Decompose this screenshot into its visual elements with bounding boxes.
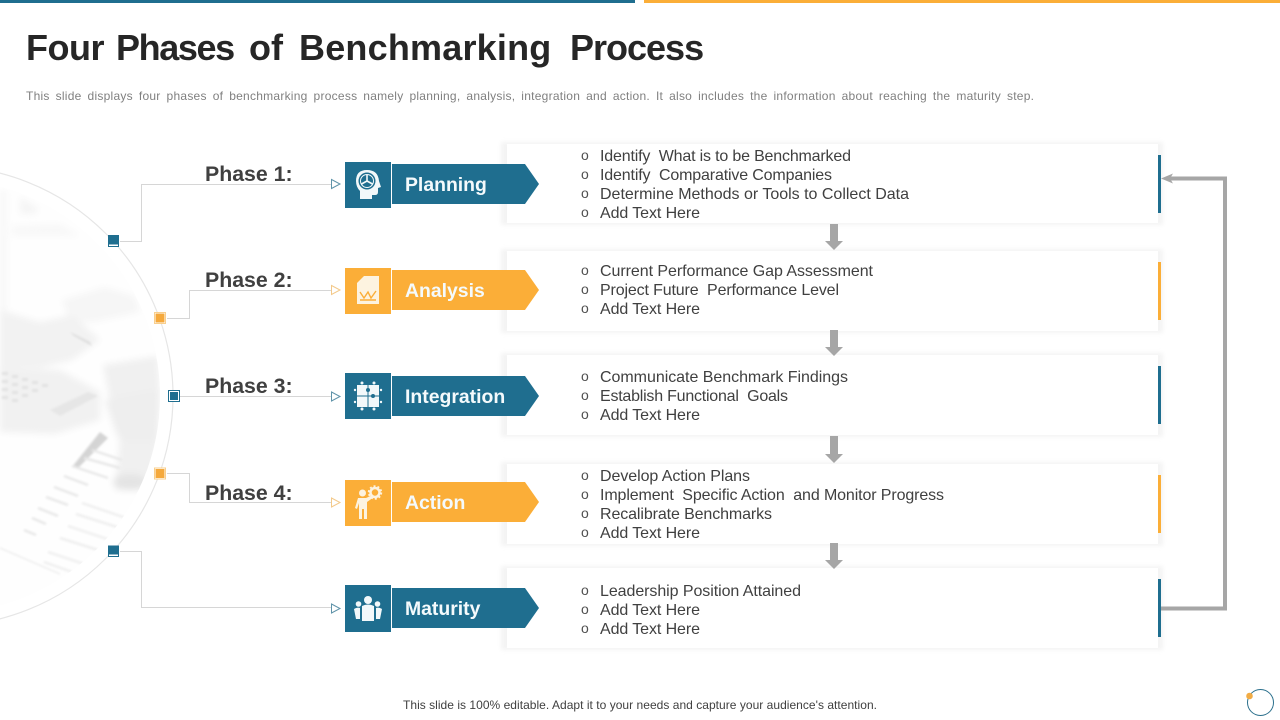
card: maturity xyxy=(501,566,1163,650)
title: Phases xyxy=(116,27,234,68)
bullet list: o xyxy=(581,185,589,201)
bullet list: o xyxy=(581,300,589,316)
bullet list: Project Future Performance Level xyxy=(600,282,839,299)
top accent bar: orange xyxy=(644,0,1280,3)
bullet list: o xyxy=(581,467,589,483)
arrowhead xyxy=(332,498,340,507)
title: Benchmarking xyxy=(299,27,551,68)
phase bar: analysis xyxy=(392,270,539,310)
photo detail: pen and document lines xyxy=(0,432,126,574)
bullet list: Identify What is to be Benchmarked xyxy=(600,148,851,165)
bullet list: Current Performance Gap Assessment xyxy=(600,263,874,280)
bullet list: Develop Action Plans xyxy=(600,468,750,485)
bullet list: Identify Comparative Companies xyxy=(600,167,832,184)
bullet list: o xyxy=(581,387,589,403)
arrowhead xyxy=(332,392,340,401)
bullet list: o xyxy=(581,147,589,163)
bullet list xyxy=(581,582,801,638)
card: analysis xyxy=(501,249,1163,333)
phase bar: action: Action xyxy=(405,492,465,514)
bullet list: o xyxy=(581,262,589,278)
marker: maturity xyxy=(108,546,118,556)
down arrow 2 xyxy=(825,330,843,356)
bullet list: Implement Specific Action and Monitor Progress xyxy=(600,487,944,504)
bullet list: Establish Functional Goals xyxy=(600,388,788,405)
bullet list: o xyxy=(581,582,589,598)
marker: phase 4 xyxy=(154,468,166,479)
phase 3 label: Phase 3: xyxy=(205,374,293,398)
subtitle: This slide displays four phases of benchmarking process namely planning, analysis, integration and action. It also includes the information about reaching the maturity step. xyxy=(26,89,1034,103)
title: Four xyxy=(26,27,104,68)
bullet list xyxy=(581,467,944,542)
bullet list: Recalibrate Benchmarks xyxy=(600,506,772,523)
icon: document with chart xyxy=(345,268,391,314)
bullet list: o xyxy=(581,486,589,502)
logo mark xyxy=(1246,690,1274,716)
arrowhead xyxy=(332,604,340,613)
bullet list: Leadership Position Attained xyxy=(600,583,801,600)
connector: phase 3 xyxy=(180,392,340,401)
marker: phase 2 xyxy=(154,312,166,324)
connector: maturity xyxy=(120,552,340,613)
icon: person with gear xyxy=(345,480,391,526)
down arrow 1 xyxy=(825,224,843,250)
bullet list: o xyxy=(581,524,589,540)
arrowhead xyxy=(332,286,340,294)
bullet list: Add Text Here xyxy=(600,407,700,424)
bullet list: o xyxy=(581,406,589,422)
arrowhead xyxy=(332,180,340,188)
phase bar: action xyxy=(392,482,539,522)
bullet list: o xyxy=(581,368,589,384)
phase 2 label: Phase 2: xyxy=(205,268,293,292)
bullet list: Add Text Here xyxy=(600,205,700,222)
bullet list: Add Text Here xyxy=(600,621,700,638)
top accent bar: teal xyxy=(0,0,635,3)
icon: head with gear xyxy=(345,162,391,208)
title: of xyxy=(249,27,284,68)
phase bar: analysis: Analysis xyxy=(405,280,485,302)
down arrow 4 xyxy=(825,543,843,569)
bullet list: Add Text Here xyxy=(600,301,700,318)
phase bar: maturity xyxy=(392,588,539,628)
marker: phase 3 xyxy=(168,390,180,402)
card: action xyxy=(501,462,1163,546)
bullet list: o xyxy=(581,281,589,297)
bullet list: o xyxy=(581,620,589,636)
down arrow 3 xyxy=(825,436,843,463)
phase bar: maturity: Maturity xyxy=(405,598,481,620)
icon: group of people xyxy=(345,585,391,632)
icon: puzzle xyxy=(345,373,391,419)
bullet list: o xyxy=(581,601,589,617)
phase 1 label: Phase 1: xyxy=(205,162,293,186)
phase bar: integration: Integration xyxy=(405,386,505,408)
bullet list: o xyxy=(581,166,589,182)
bullet list: Determine Methods or Tools to Collect Data xyxy=(600,186,909,203)
footer note: This slide is 100% editable. Adapt it to your needs and capture your audience's attention. xyxy=(403,698,877,712)
bullet list: Communicate Benchmark Findings xyxy=(600,369,848,386)
connector: phase 4 xyxy=(167,474,340,507)
bullet list xyxy=(581,262,874,318)
phase bar: planning xyxy=(392,164,539,204)
card: integration xyxy=(501,353,1163,437)
connector: phase 2 xyxy=(167,286,340,318)
feedback arrow xyxy=(1161,174,1225,608)
faded photo circle xyxy=(0,166,173,626)
bullet list xyxy=(581,368,848,424)
phase 4 label: Phase 4: xyxy=(205,481,293,505)
phase bar: integration xyxy=(392,376,539,416)
connector: phase 1 xyxy=(120,180,340,242)
phase labels xyxy=(205,162,293,505)
bullet list xyxy=(581,147,909,222)
card: planning xyxy=(501,142,1163,225)
photo detail: calculator keys xyxy=(2,332,98,416)
bullet list: Add Text Here xyxy=(600,602,700,619)
phase bar: planning: Planning xyxy=(405,174,487,196)
bullet list: o xyxy=(581,204,589,220)
title: Process xyxy=(570,27,703,68)
bullet list: Add Text Here xyxy=(600,525,700,542)
bullet list: o xyxy=(581,505,589,521)
marker: phase 1 xyxy=(108,236,118,246)
